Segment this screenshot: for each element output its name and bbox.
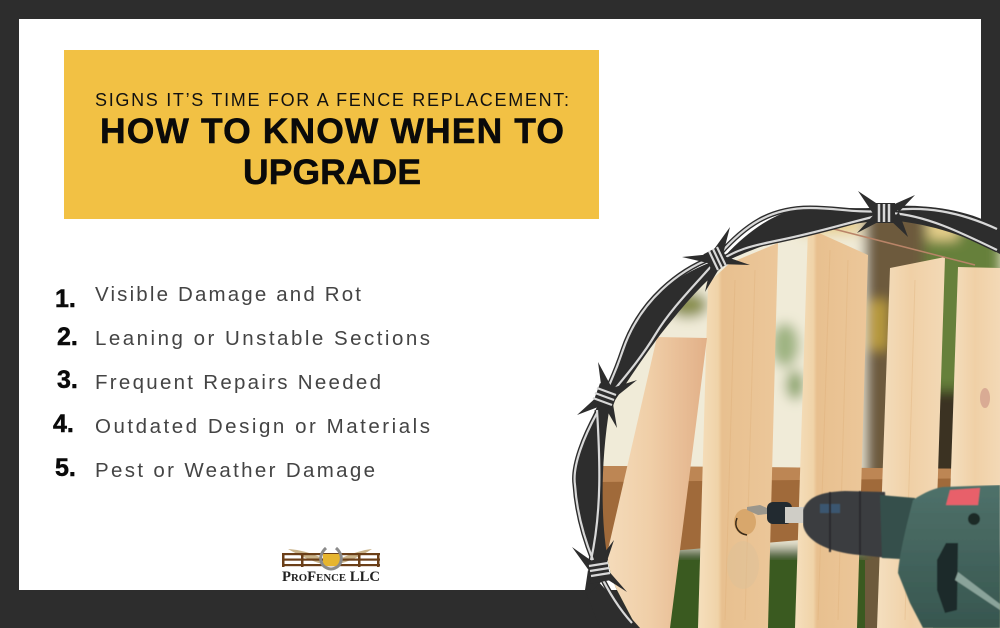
subtitle: SIGNS IT’S TIME FOR A FENCE REPLACEMENT: xyxy=(95,90,569,110)
lower background, green and trunk xyxy=(608,560,878,628)
barb upper xyxy=(682,227,750,292)
drill xyxy=(747,485,1000,628)
blurred background xyxy=(600,210,1000,628)
board 4 xyxy=(877,257,945,628)
item 4: Outdated Design or Materials xyxy=(95,415,430,438)
barb lower xyxy=(572,540,627,593)
board 2 xyxy=(698,243,778,628)
item 3: 3. xyxy=(57,366,78,394)
item 2: 2. xyxy=(57,323,78,351)
barbed wire frame xyxy=(572,191,1000,628)
photo: drilling a wooden fence xyxy=(590,210,1000,628)
board 1 xyxy=(608,337,707,628)
wire: light strands xyxy=(575,208,997,623)
item 1: 1. xyxy=(55,285,76,313)
logo: ProFence LLC: ProFence LLC xyxy=(282,569,380,585)
wire: dark bundle xyxy=(575,206,1000,628)
knot and drill hole xyxy=(734,509,756,536)
horizontal rail xyxy=(602,466,951,550)
item 2: Leaning or Unstable Sections xyxy=(95,327,430,350)
main title: UPGRADE xyxy=(243,152,421,192)
barb top right xyxy=(857,191,915,237)
barb left xyxy=(577,362,637,428)
numbered list xyxy=(53,283,430,482)
board 3 xyxy=(795,228,868,628)
string xyxy=(830,228,975,265)
photo base xyxy=(604,250,1000,628)
item 5: Pest or Weather Damage xyxy=(95,459,375,482)
main title xyxy=(100,111,564,192)
wood grain xyxy=(725,250,915,620)
main title: HOW TO KNOW WHEN TO xyxy=(100,111,564,151)
item 4: 4. xyxy=(53,410,74,438)
item 1 xyxy=(55,283,361,313)
logo: ProFence LLC xyxy=(282,548,380,585)
board 5 xyxy=(950,267,1000,500)
title banner xyxy=(64,50,599,219)
wire: strands outline xyxy=(575,208,997,623)
item 3: Frequent Repairs Needed xyxy=(95,371,381,394)
item 5: 5. xyxy=(55,454,76,482)
item 1: Visible Damage and Rot xyxy=(95,283,361,306)
